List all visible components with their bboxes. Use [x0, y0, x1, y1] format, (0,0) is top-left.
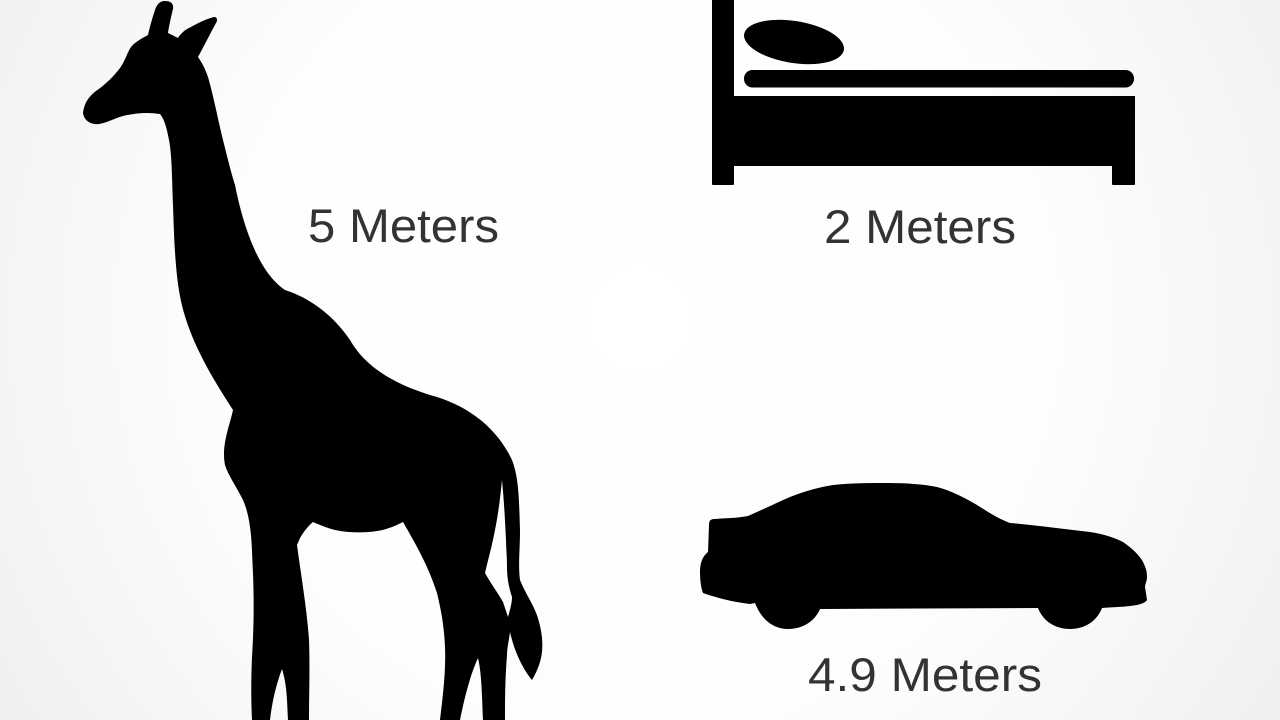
icon: car silhouette [700, 483, 1147, 629]
label: car length: 4.9 Meters [808, 648, 1042, 701]
icon: giraffe silhouette [83, 1, 542, 720]
label: giraffe length: 5 Meters [308, 199, 499, 252]
icon: bed silhouette [712, 0, 1135, 185]
label: bed length: 2 Meters [824, 200, 1016, 253]
